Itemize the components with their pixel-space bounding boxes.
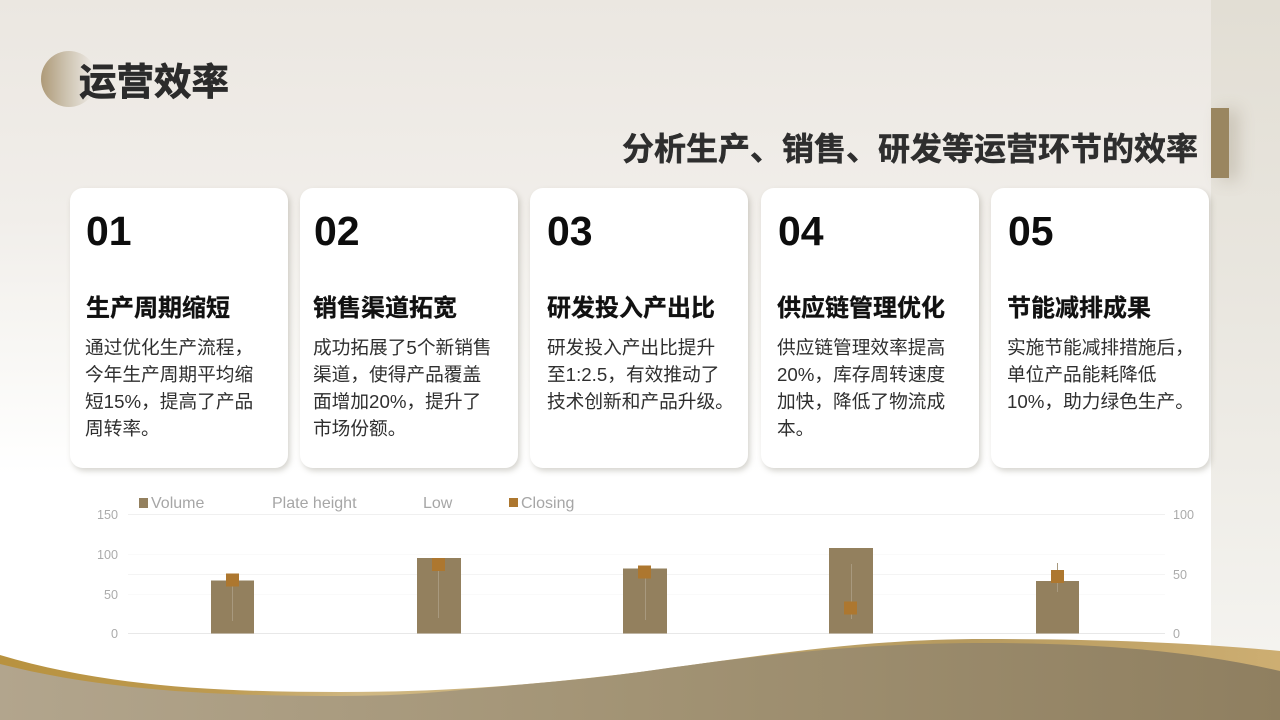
card heading 03: 研发投入产出比 — [547, 295, 715, 322]
card body 04: 供应链管理效率提高 — [777, 337, 945, 358]
card heading 05: 节能减排成果 — [1007, 295, 1151, 322]
card body 05: 单位产品能耗降低 — [1007, 364, 1156, 385]
card body 04: 加快，降低了物流成 — [777, 391, 945, 412]
high-low wicks — [232, 563, 1058, 621]
bottom wave decoration — [0, 639, 1280, 720]
card body 05 — [1007, 337, 1194, 412]
card body 03: 至1:2.5，有效推动了 — [547, 364, 719, 385]
card body 04: 本。 — [777, 418, 814, 439]
left axis labels: 150 — [97, 508, 118, 522]
card body 02 — [313, 337, 492, 439]
card body 05: 10%，助力绿色生产。 — [1007, 391, 1194, 412]
left axis labels — [97, 508, 118, 641]
card body 02: 面增加20%，提升了 — [313, 391, 481, 412]
right side strip — [1211, 0, 1280, 720]
card body 01: 短15%，提高了产品 — [85, 391, 253, 412]
chart legend: Closing — [521, 495, 574, 512]
chart gridlines — [128, 514, 1165, 634]
panel: card 02 — [300, 188, 518, 468]
title circle icon — [41, 51, 97, 107]
chart legend: Low — [423, 495, 453, 512]
card body 04: 20%，库存周转速度 — [777, 364, 945, 385]
volume bars — [211, 548, 1079, 634]
panel: card 05 — [991, 188, 1209, 468]
panel: card 01 — [70, 188, 288, 468]
card heading 04: 供应链管理优化 — [777, 295, 945, 322]
panel: card 04 — [761, 188, 979, 468]
card number 05: 05 — [1008, 208, 1054, 254]
left axis labels: 50 — [104, 588, 118, 602]
panel: card 03 — [530, 188, 748, 468]
accent bar — [1211, 108, 1229, 178]
card number 03: 03 — [547, 208, 593, 254]
right axis labels: 50 — [1173, 568, 1187, 582]
right axis labels: 0 — [1173, 627, 1180, 641]
card body 01: 周转率。 — [85, 418, 160, 439]
right axis labels: 100 — [1173, 508, 1194, 522]
card body 01: 通过优化生产流程， — [85, 337, 253, 358]
card body 01 — [85, 337, 253, 439]
card body 03: 技术创新和产品升级。 — [547, 391, 734, 412]
card body 03 — [547, 337, 734, 412]
card number 04: 04 — [778, 208, 824, 254]
chart: volume and price combo — [97, 495, 1194, 641]
left axis labels: 0 — [111, 627, 118, 641]
title: 运营效率 — [79, 61, 229, 103]
card heading 01: 生产周期缩短 — [86, 295, 230, 322]
chart legend: Volume — [151, 495, 204, 512]
subtitle: 分析生产、销售、研发等运营环节的效率 — [622, 131, 1198, 167]
card body 05: 实施节能减排措施后， — [1007, 337, 1194, 358]
card body 01: 今年生产周期平均缩 — [85, 364, 253, 385]
card heading 02: 销售渠道拓宽 — [313, 295, 457, 322]
left axis labels: 100 — [97, 548, 118, 562]
chart legend: Plate height — [272, 495, 357, 512]
right axis labels — [1173, 508, 1194, 641]
closing markers — [226, 558, 1064, 614]
card body 04 — [777, 337, 945, 439]
card body 02: 渠道，使得产品覆盖 — [313, 364, 481, 385]
chart legend — [139, 495, 574, 512]
card body 02: 市场份额。 — [313, 418, 406, 439]
card number 02: 02 — [314, 208, 360, 254]
card body 03: 研发投入产出比提升 — [547, 337, 715, 358]
card number 01: 01 — [86, 208, 132, 254]
card body 02: 成功拓展了5个新销售 — [313, 337, 492, 358]
